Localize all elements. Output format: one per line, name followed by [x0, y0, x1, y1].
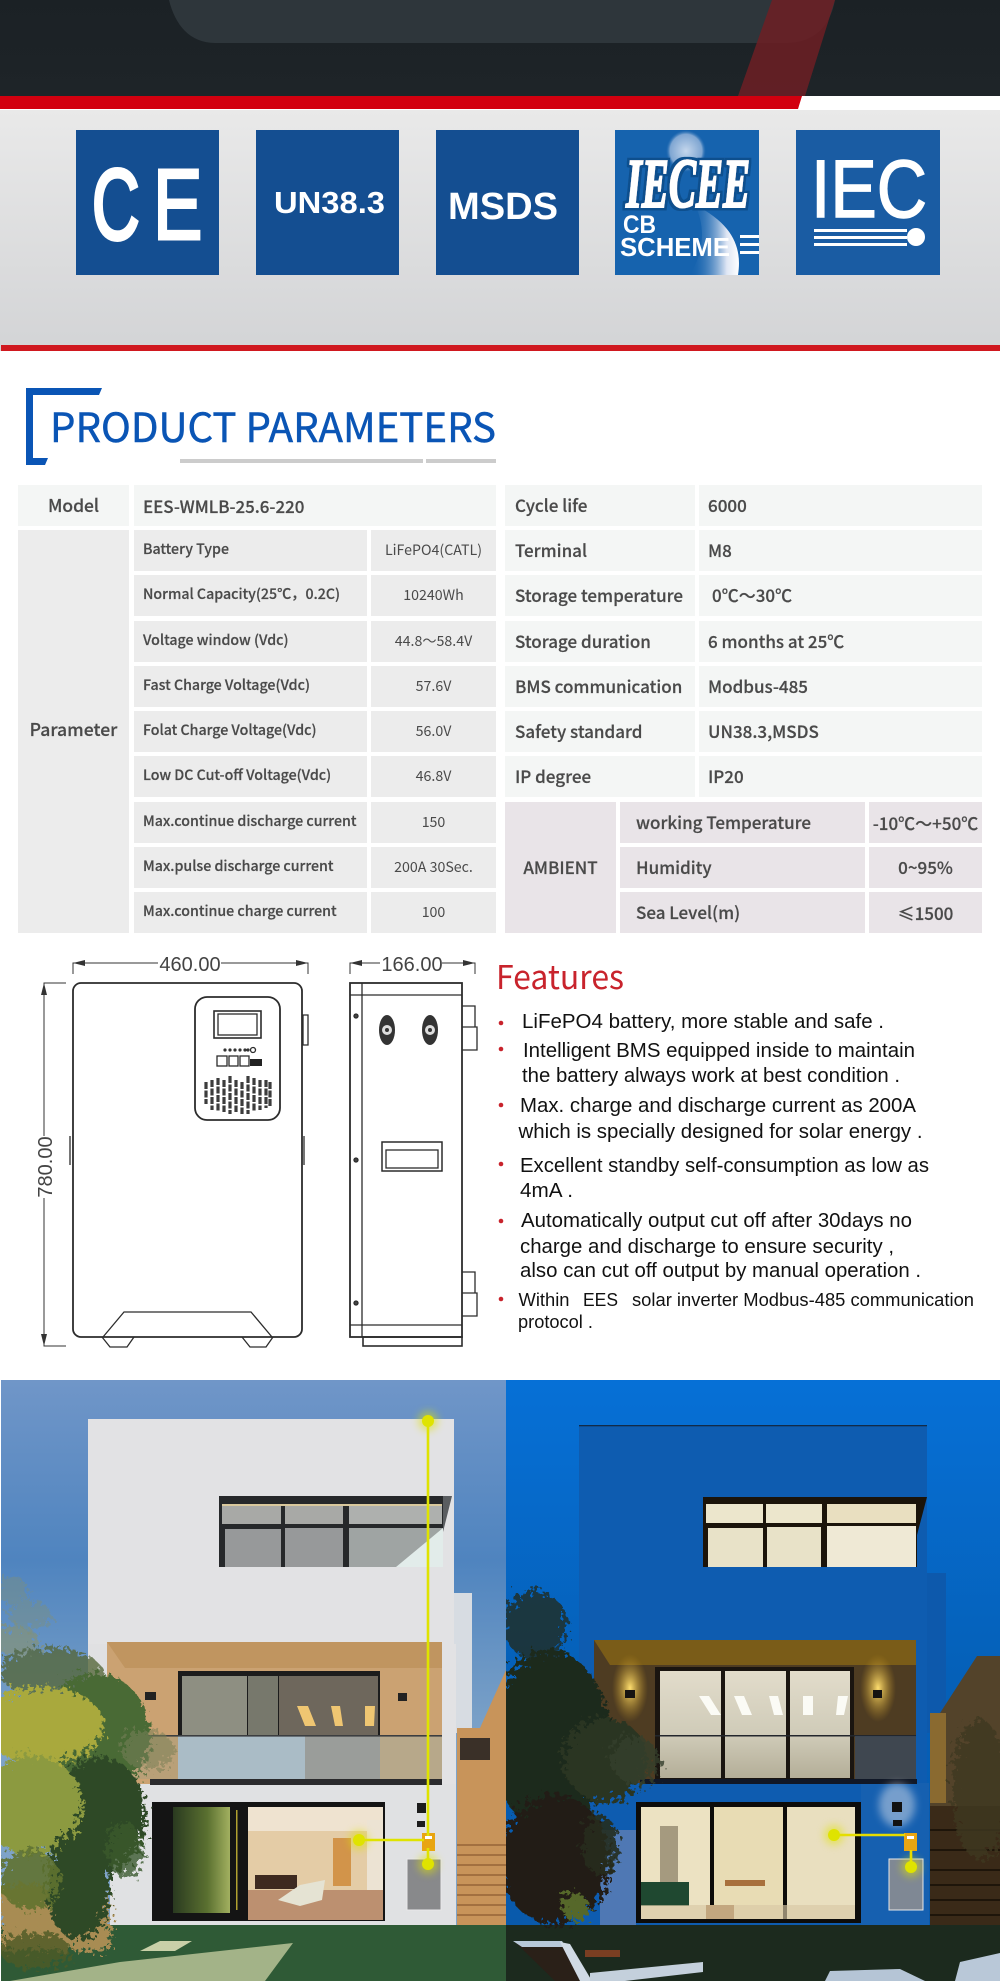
row: fast charge voltage: Fast Charge Voltage(Vdc)	[143, 674, 310, 694]
row: BMS communication	[505, 666, 982, 707]
feature list text: Within	[518, 1290, 570, 1310]
lounge chairs	[513, 1941, 1000, 1981]
badge: UN38.3: UN38.3	[274, 185, 385, 220]
row: safety standard: Safety standard	[515, 718, 642, 743]
dimension: height 780: 780.00	[35, 1136, 57, 1198]
row: float charge voltage: 56.0V	[416, 720, 451, 740]
row: terminal: M8	[708, 537, 732, 562]
row: voltage window	[134, 621, 496, 662]
badge: UN38.3	[256, 130, 399, 275]
row: fast charge voltage: 57.6V	[416, 676, 451, 696]
row: humidity: Humidity	[636, 854, 712, 878]
row: max continue discharge current: Max.continue discharge current	[143, 810, 356, 830]
feature list text: EES	[583, 1290, 618, 1310]
red divider line	[1, 345, 1000, 351]
certification badges	[76, 130, 940, 275]
feature list text: the battery always work at best condition .	[522, 1065, 900, 1087]
row: max pulse discharge current: 200A 30Sec.	[394, 856, 473, 876]
row: max continue discharge current	[134, 802, 496, 843]
badge: CE: E	[153, 148, 202, 261]
features panel	[496, 955, 974, 1332]
row: max continue charge current: Max.continue charge current	[143, 900, 337, 920]
feature list text	[517, 1011, 974, 1332]
badge: CE: C	[92, 148, 140, 260]
row: float charge voltage: Folat Charge Voltage(Vdc)	[143, 720, 317, 740]
feature list text: Automatically output cut off after 30days no	[521, 1210, 912, 1232]
row: BMS communication: Modbus-485	[708, 673, 808, 698]
row: voltage window: Voltage window (Vdc)	[143, 630, 289, 650]
lawn	[1, 1925, 506, 1981]
row: storage temperature: 0℃～30℃	[712, 582, 792, 607]
row: low DC cut-off voltage: Low DC Cut-off Voltage(Vdc)	[143, 764, 331, 784]
upper window	[219, 1496, 452, 1567]
badge: IEC	[796, 130, 940, 275]
row: max continue charge current: 100	[422, 902, 445, 922]
badge: MSDS: MSDS	[448, 186, 558, 228]
parameter group label	[18, 530, 129, 933]
feature list text: LiFePO4 battery, more stable and safe .	[522, 1011, 884, 1033]
bullets	[499, 1021, 503, 1301]
row: IP degree: IP degree	[515, 763, 591, 788]
side view	[350, 983, 477, 1346]
right garden wall and stairs	[930, 1656, 1000, 1925]
building body	[579, 1425, 946, 1925]
feature list text: Max. charge and discharge current as 200A	[520, 1095, 917, 1117]
dimension: height 780	[35, 983, 66, 1346]
row: humidity: 0~95%	[898, 854, 953, 879]
wall lamps	[879, 1783, 915, 1827]
row: battery type: Battery Type	[143, 538, 229, 558]
row: voltage window: 44.8～58.4V	[395, 630, 472, 650]
row: storage duration	[505, 621, 982, 662]
row: normal capacity: Normal Capacity(25℃，0.2C)	[143, 584, 340, 604]
front view	[70, 983, 308, 1347]
badge: IECEE CB scheme: SCHEME	[620, 232, 730, 262]
photo: house by day	[1, 1380, 506, 1981]
row: sea level	[620, 892, 982, 933]
ground floor interior	[152, 1802, 426, 1921]
row: cycle life	[505, 485, 982, 526]
row: safety standard: UN38.3,MSDS	[708, 718, 819, 743]
dimension: width 460: 460.00	[159, 954, 221, 976]
row: storage temperature	[505, 575, 982, 616]
feature list text: which is specially designed for solar energy .	[517, 1121, 922, 1143]
dark header band	[0, 0, 1000, 109]
feature list text: Intelligent BMS equipped inside to maintain	[523, 1040, 915, 1062]
row: cycle life: 6000	[708, 492, 747, 517]
row: battery type: LiFePO4(CATL)	[385, 540, 482, 560]
dimension: depth 166	[350, 954, 475, 976]
heading: product parameters: PRODUCT PARAMETERS	[50, 396, 496, 454]
badge: IECEE CB scheme	[615, 130, 759, 275]
photo: house at night	[506, 1380, 1000, 1981]
stair wood wall	[457, 1670, 506, 1925]
row: terminal	[505, 530, 982, 571]
row: max pulse discharge current	[134, 847, 496, 888]
row: IP degree	[505, 756, 982, 797]
row: sea level: ≤1500	[898, 900, 953, 924]
model value: EES-WMLB-25.6-220	[143, 493, 304, 518]
solar wiring overlay	[824, 1825, 923, 1910]
model label	[18, 485, 129, 526]
technical drawing: battery dimensions	[35, 954, 478, 1348]
tree	[490, 1591, 1000, 1925]
row: low DC cut-off voltage	[134, 756, 496, 797]
row: working temperature: -10℃～+50℃	[873, 810, 978, 835]
lawn	[506, 1925, 1000, 1981]
row: battery type	[134, 530, 496, 571]
row: max continue charge current	[134, 892, 496, 933]
row: max continue discharge current: 150	[422, 812, 445, 832]
feature list text: solar inverter Modbus-485 communication	[632, 1290, 974, 1310]
row: safety standard	[505, 711, 982, 752]
ground floor interior	[636, 1802, 861, 1923]
row: working temperature: working Temperature	[636, 809, 811, 834]
row: sea level: Sea Level(m)	[636, 899, 740, 924]
row: float charge voltage	[134, 711, 496, 752]
row: fast charge voltage	[134, 666, 496, 707]
parameter table	[18, 485, 982, 933]
badge: MSDS	[436, 130, 579, 275]
row: working temperature	[620, 802, 982, 843]
row: storage temperature: Storage temperature	[515, 582, 683, 607]
tree	[0, 1576, 174, 1968]
feature list text: protocol .	[518, 1312, 593, 1332]
row: IP degree: IP20	[708, 763, 744, 788]
model value	[134, 485, 496, 526]
row: low DC cut-off voltage: 46.8V	[416, 766, 451, 786]
row: max pulse discharge current: Max.pulse discharge current	[143, 856, 334, 876]
solar wiring overlay	[349, 1411, 441, 1910]
badge: IECEE CB scheme: CB	[623, 211, 656, 239]
ambient group label: AMBIENT	[523, 854, 598, 879]
ambient group label	[505, 802, 616, 933]
row: normal capacity: 10240Wh	[403, 584, 464, 604]
row: normal capacity	[134, 575, 496, 616]
dimension: width 460	[73, 954, 308, 976]
feature list text: also can cut off output by manual operation .	[520, 1260, 921, 1282]
row: cycle life: Cycle life	[515, 492, 587, 517]
row: terminal: Terminal	[515, 537, 587, 562]
building body	[88, 1419, 472, 1925]
parameter group label: Parameter	[30, 717, 117, 742]
dimension: depth 166: 166.00	[381, 954, 443, 976]
wood balcony recess	[107, 1642, 442, 1785]
feature list text: Excellent standby self-consumption as low as	[520, 1155, 929, 1177]
feature list text: charge and discharge to ensure security ,	[520, 1236, 894, 1258]
badge: CE	[76, 130, 219, 275]
row: BMS communication: BMS communication	[515, 673, 682, 698]
badge: IEC: IEC	[811, 144, 927, 235]
model label: Model	[48, 493, 99, 518]
balcony recess	[594, 1640, 917, 1784]
upper window	[703, 1497, 927, 1567]
feature list text: 4mA .	[520, 1180, 573, 1202]
certification band	[0, 110, 1000, 351]
row: storage duration: 6 months at 25℃	[708, 628, 844, 653]
row: storage duration: Storage duration	[515, 628, 651, 653]
badge: IECEE CB scheme: IECEE	[625, 146, 750, 223]
row: humidity	[620, 847, 982, 888]
